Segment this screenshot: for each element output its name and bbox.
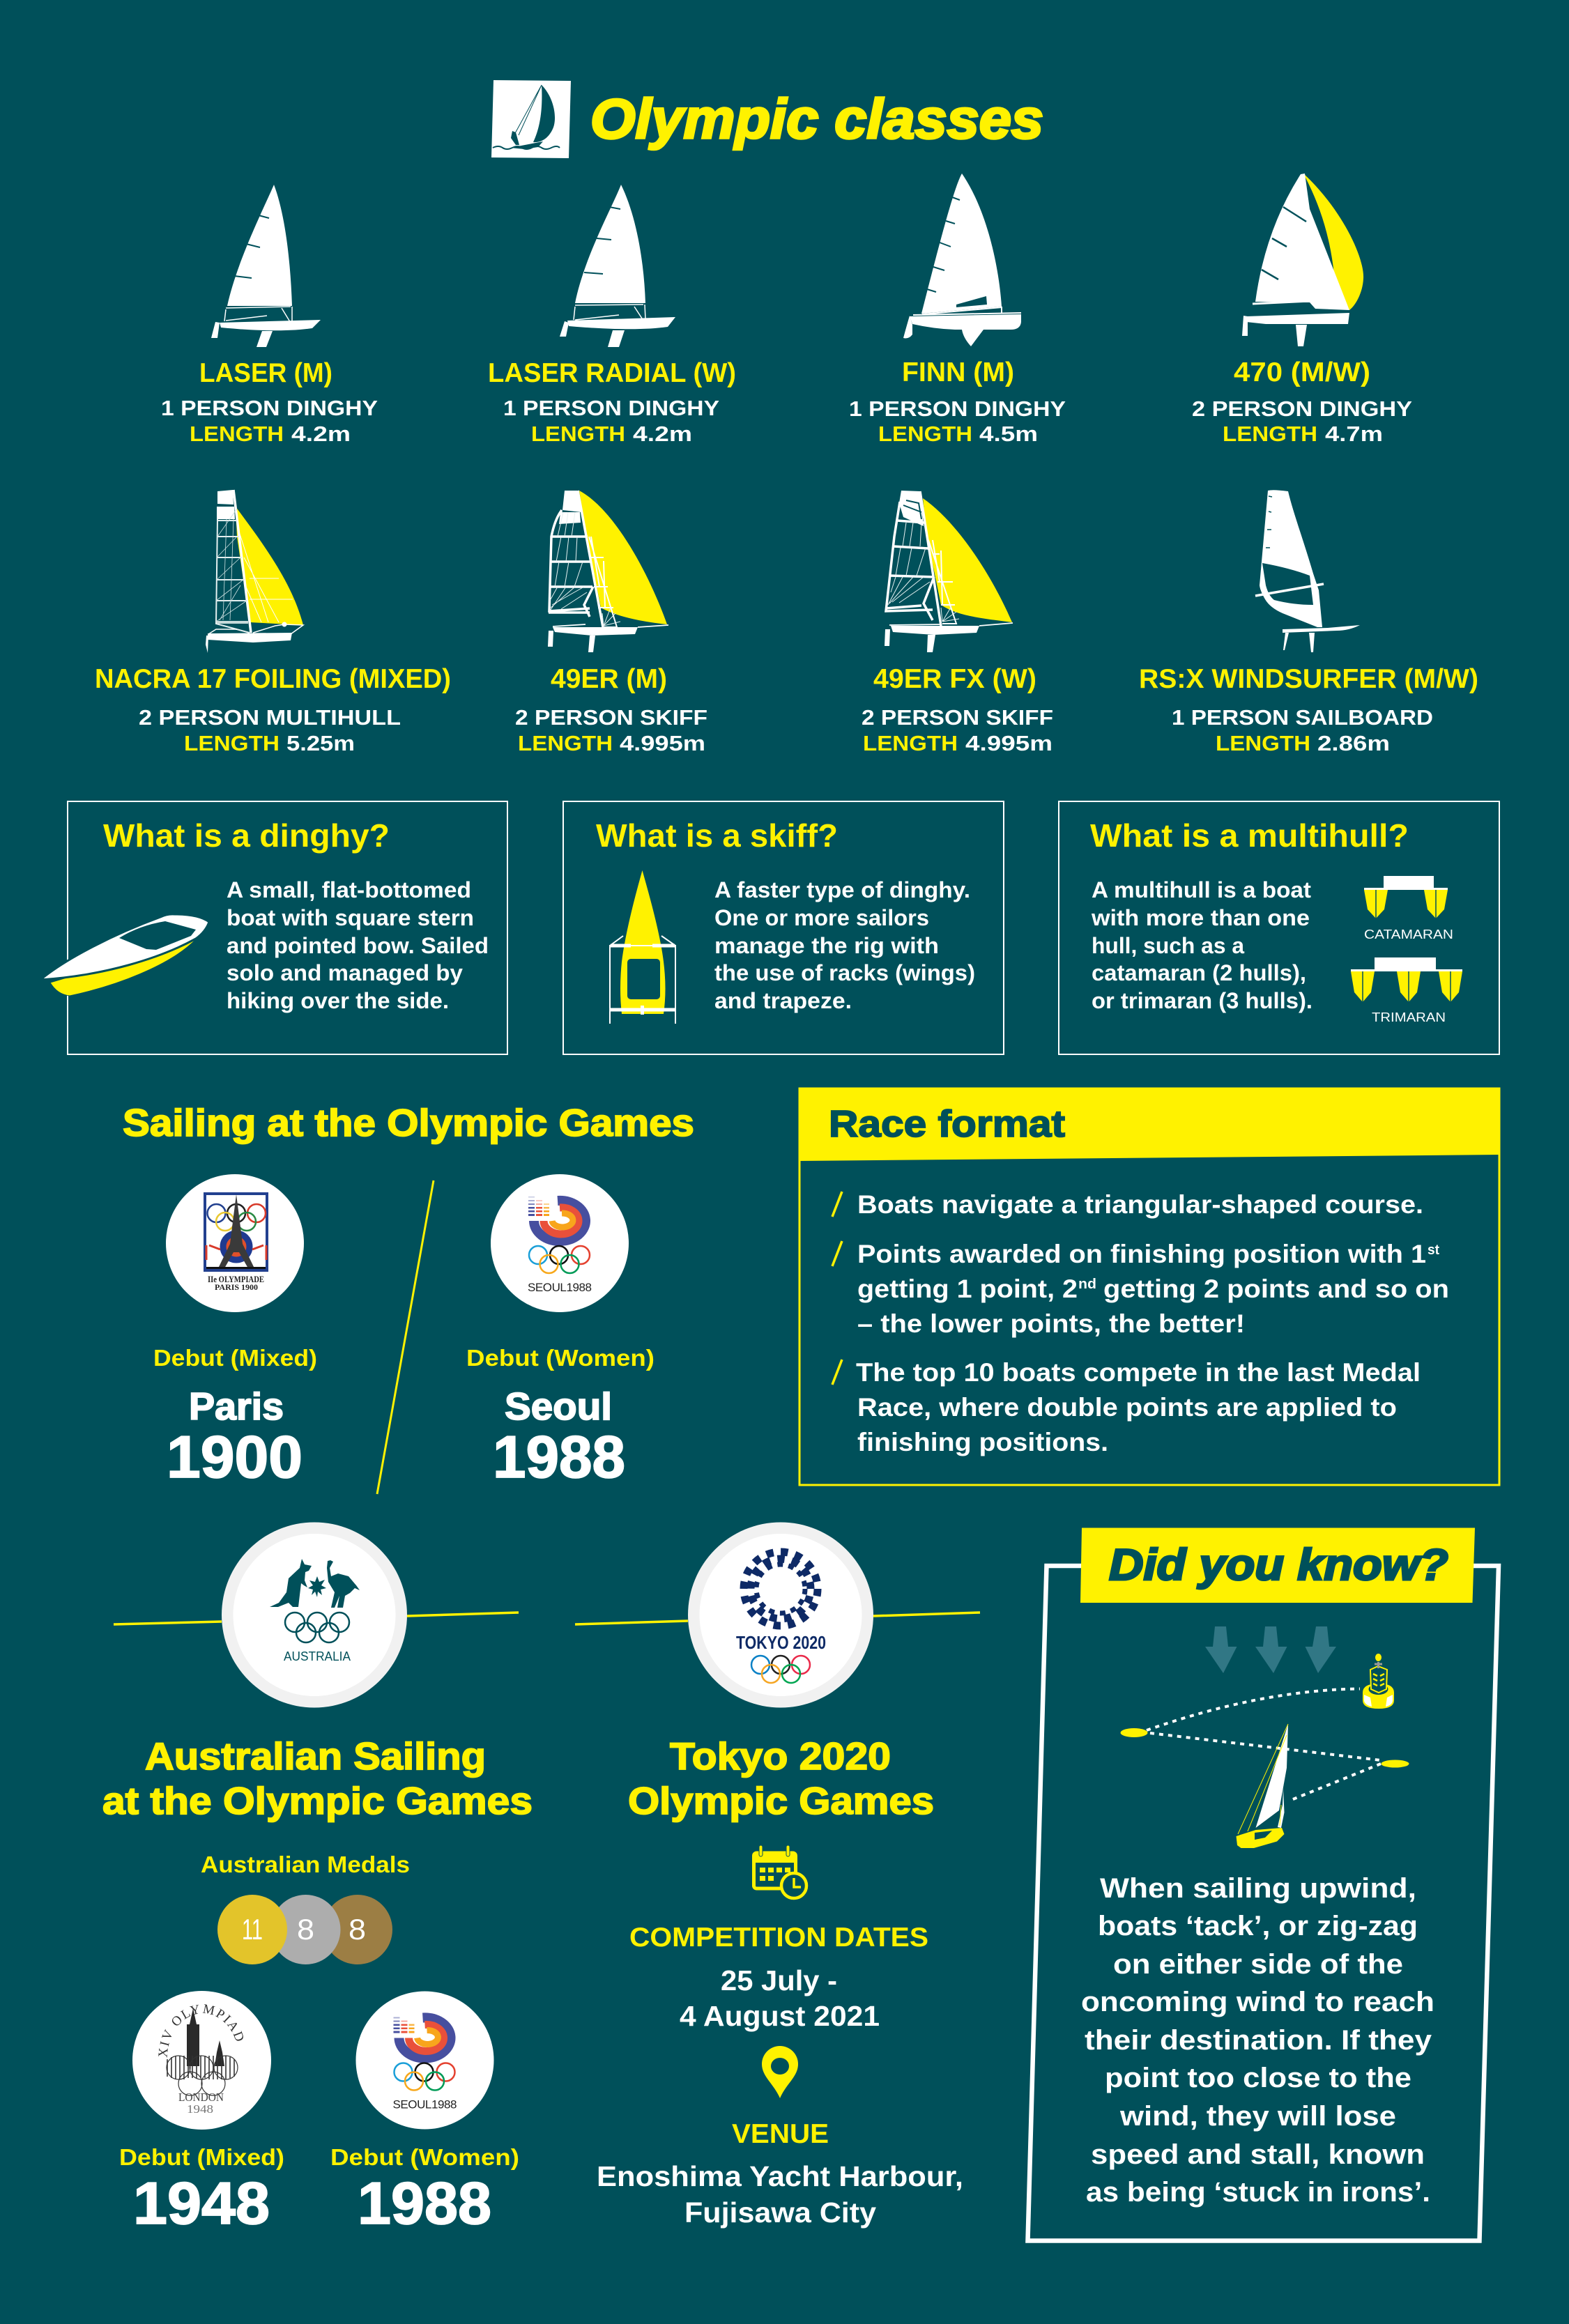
bullet two: – the lower points, the better! [857,1309,1245,1338]
heading: race format: Race format [829,1103,1065,1145]
icon: windsurfer [1255,490,1360,652]
class type: 1 PERSON SAILBOARD [1172,705,1433,730]
body text: tacking: wind, they will lose [1119,2101,1396,2132]
class length: 4.995m [965,731,1053,755]
class type: 2 PERSON SKIFF [515,705,707,730]
icon: buoy [1363,1654,1394,1709]
body text: tacking: on either side of the [1113,1949,1403,1980]
diagram: catamaran: CATAMARAN [1364,928,1453,941]
class type: 2 PERSON DINGHY [1192,397,1412,421]
heading: skiff: What is a skiff? [596,817,838,854]
class name: LASER RADIAL (W) [488,358,736,388]
class length: LENGTH [518,731,613,755]
stat: Australia mixed debut: Debut (Mixed) [119,2144,284,2170]
panel: what is a skiff [563,801,1004,1054]
bullet two: st [1428,1242,1439,1258]
diagram: trimaran [1351,957,1462,1024]
class length [190,422,351,446]
body text: dinghy: hiking over the side. [227,988,449,1013]
text: venue name: Fujisawa City [684,2196,876,2229]
logo: Seoul 1988 small [355,1992,493,2130]
label: australian medals: Australian Medals [201,1852,410,1877]
class name: 49ER (M) [551,664,667,694]
body text: dinghy: solo and managed by [227,960,463,985]
body text: multihull: with more than one [1091,905,1310,930]
bullet three: finishing positions. [857,1428,1108,1456]
bullet three: Race, where double points are applied to [857,1393,1397,1422]
rings: Tokyo [751,1656,810,1683]
stat: Seoul debut: Debut (Women) [466,1345,655,1371]
stat: Paris debut [153,1345,317,1491]
class length [184,731,355,755]
icon: 470 boat [1242,174,1363,346]
body text: tacking: point too close to the [1105,2063,1411,2093]
chart: medal counts: 8 [349,1913,366,1946]
logo: Paris 1900 [166,1174,304,1312]
heading: sailing at the olympic games: Sailing at the Olympic Games [123,1101,694,1144]
class name: LASER (M) [199,358,332,388]
icon: olympic sailing pictogram [491,80,571,158]
class name: NACRA 17 FOILING (MIXED) [95,664,451,694]
stat: Australia mixed debut: 1948 [133,2171,270,2237]
logo: Seoul 1988 small: SEOUL1988 [393,2098,457,2111]
body text: tacking: When sailing upwind, [1100,1873,1416,1904]
body text: tacking: speed and stall, known [1091,2139,1425,2170]
label: venue: VENUE [732,2119,829,2149]
body text: multihull: hull, such as a [1092,933,1244,958]
text: venue name: Enoshima Yacht Harbour, [597,2160,963,2192]
bullet two [832,1240,1449,1338]
logo: Paris 1900: PARIS 1900 [215,1282,258,1292]
heading: dinghy: What is a dinghy? [103,817,390,854]
class length: LENGTH [1216,731,1310,755]
bullet two: getting 2 points and so on [1103,1275,1449,1303]
class length: 4.5m [979,422,1038,446]
body text: dinghy: boat with square stern [227,905,474,930]
bullet two: getting 1 point, 2 [857,1275,1078,1303]
heading: australian sailing: at the Olympic Games [102,1779,533,1822]
class length: 4.995m [620,731,705,755]
text: TOKYO 2020: TOKYO 2020 [736,1632,826,1653]
logo: Seoul 1988: SEOUL1988 [528,1281,592,1294]
panel: sailing at the olympic games [123,1101,694,1494]
heading: australian sailing [102,1734,533,1822]
heading: Olympic classes: Olympic classes [590,88,1043,150]
boat card: 49er [515,491,707,755]
body text: skiff: One or more sailors [714,905,929,930]
stat: Seoul debut [466,1345,655,1491]
panel: tokyo 2020 [575,1522,980,2229]
class length [1216,731,1390,755]
icon: laser boat [211,185,321,347]
body text: tacking: boats ‘tack’, or zig-zag [1098,1911,1418,1941]
chart: medal counts: 8 [297,1913,314,1946]
body text: multihull: or trimaran (3 hulls). [1092,988,1312,1013]
class length: 4.2m [633,422,692,446]
boat card: Laser [161,185,378,446]
heading: tokyo 2020: Olympic Games [628,1779,934,1822]
diagram: course path [1121,1689,1409,1801]
icon: skiff from above [610,870,675,1024]
class length [878,422,1038,446]
rings: Australia [285,1613,349,1642]
chart: medal counts [217,1895,392,1964]
bullet three [832,1358,1421,1456]
body text: dinghy: and pointed bow. Sailed [227,933,489,958]
logo: Seoul 1988 [491,1174,629,1312]
body text: skiff: and trapeze. [714,988,852,1013]
icon: wind arrows [1205,1626,1336,1673]
logo: Paris 1900: IIe OLYMPIADE [208,1274,264,1284]
panel: did you know [1027,1527,1499,2241]
body text: multihull [1091,877,1312,1013]
bullet two: Points awarded on finishing position with 1 [857,1240,1426,1268]
icon: location pin [762,2046,798,2098]
decorative line and Australia badge [114,1522,519,1707]
panel: australian sailing [102,1522,533,2237]
class length [518,731,705,755]
class length [863,731,1053,755]
class type: 1 PERSON DINGHY [503,396,719,420]
stat: Australia women debut: Debut (Women) [330,2144,519,2170]
icon: dinghy from above [40,914,209,996]
class length: 5.25m [286,731,355,755]
body text: dinghy [227,877,489,1013]
text: dates: 4 August 2021 [680,2000,880,2032]
stat: Seoul debut: Seoul [505,1385,612,1428]
logo: London 1948 [132,1991,271,2130]
class length: 2.86m [1317,731,1390,755]
class length [1223,422,1383,446]
heading banner: did you know [1080,1527,1475,1603]
label: competition dates: COMPETITION DATES [629,1923,928,1953]
icon: finn boat [903,174,1021,346]
boat card: Finn [849,174,1066,446]
class length: 4.2m [291,422,351,446]
icon: sailing yacht [1237,1724,1288,1848]
logo: Tokyo wreath [744,1552,818,1626]
text: venue name [597,2160,963,2229]
class name: RS:X WINDSURFER (M/W) [1139,664,1478,694]
class type: 1 PERSON DINGHY [161,396,378,420]
heading banner: did you know: Did you know? [1109,1541,1448,1590]
boat card: RS:X windsurfer [1139,490,1478,755]
heading: tokyo 2020 [628,1734,934,1822]
bullet one: Boats navigate a triangular-shaped course. [857,1190,1423,1219]
panel: race format [799,1088,1500,1485]
logo: London 1948: XIV OLYMPIAD [158,2004,243,2058]
text: dates: 25 July - [721,1964,837,1996]
body text: skiff: A faster type of dinghy. [714,877,970,902]
class length: LENGTH [531,422,625,446]
body text: tacking [1081,1873,1434,2208]
body text: tacking: as being ‘stuck in irons’. [1086,2177,1430,2208]
icon: 49er FX boat [885,491,1013,652]
stat: Australia women debut: 1988 [358,2171,491,2237]
heading: australian sailing: Australian Sailing [145,1734,486,1778]
logo: London 1948: 1948 [187,2102,213,2116]
bullet two: nd [1078,1277,1096,1292]
boat card: Nacra 17 [95,490,451,755]
diagram: trimaran: TRIMARAN [1372,1010,1446,1024]
body text: skiff: manage the rig with [714,933,939,958]
class length [531,422,692,446]
class name: FINN (M) [902,357,1014,387]
stat: Australia mixed debut [119,2144,284,2237]
class length: LENGTH [863,731,958,755]
chart: medal counts: 11 [242,1913,263,1946]
diagram: catamaran [1364,876,1453,941]
panel: what is a multihull [1059,801,1499,1054]
icon: kangaroo and emu crest [270,1559,360,1608]
body text: skiff [714,877,975,1013]
text: AUSTRALIA: AUSTRALIA [284,1649,351,1663]
class length: 4.7m [1325,422,1383,446]
stat: Seoul debut: 1988 [493,1424,625,1491]
stat: Paris debut: Paris [189,1385,284,1428]
icon: nacra 17 boat [206,490,303,653]
boat card: 49er FX [862,491,1053,755]
boat card: 470 [1192,174,1412,446]
body text: tacking: oncoming wind to reach [1081,1987,1434,2017]
body text: skiff: the use of racks (wings) [714,960,975,985]
class type: 1 PERSON DINGHY [849,397,1066,421]
class length: LENGTH [190,422,284,446]
divider slash [377,1180,434,1494]
panel: what is a dinghy [40,801,507,1054]
class type: 2 PERSON SKIFF [862,705,1053,730]
logo: London 1948: LONDON [178,2091,224,2104]
icon: laser radial boat [560,185,675,347]
stat: Paris debut: Debut (Mixed) [153,1345,317,1371]
title block [491,80,1043,158]
boat card: Laser Radial [488,185,736,446]
body text: tacking: their destination. If they [1085,2025,1432,2056]
stat: Paris debut: 1900 [167,1424,303,1491]
body text: dinghy: A small, flat-bottomed [227,877,471,902]
heading: tokyo 2020: Tokyo 2020 [670,1734,891,1778]
icon: 49er boat [548,491,668,652]
class length: LENGTH [184,731,280,755]
class name: 49ER FX (W) [873,664,1036,694]
class length: LENGTH [1223,422,1317,446]
body text: multihull: catamaran (2 hulls), [1092,960,1306,985]
body text: multihull: A multihull is a boat [1092,877,1311,902]
text: dates [680,1964,880,2032]
class type: 2 PERSON MULTIHULL [139,705,401,730]
bullet three: The top 10 boats compete in the last Medal [856,1358,1421,1387]
class name: 470 (M/W) [1234,357,1370,387]
icon: calendar and clock [753,1845,806,1898]
class length: LENGTH [878,422,972,446]
stat: Australia women debut [330,2144,519,2237]
heading: multihull: What is a multihull? [1090,817,1409,854]
decorative line and Tokyo badge [575,1522,980,1707]
